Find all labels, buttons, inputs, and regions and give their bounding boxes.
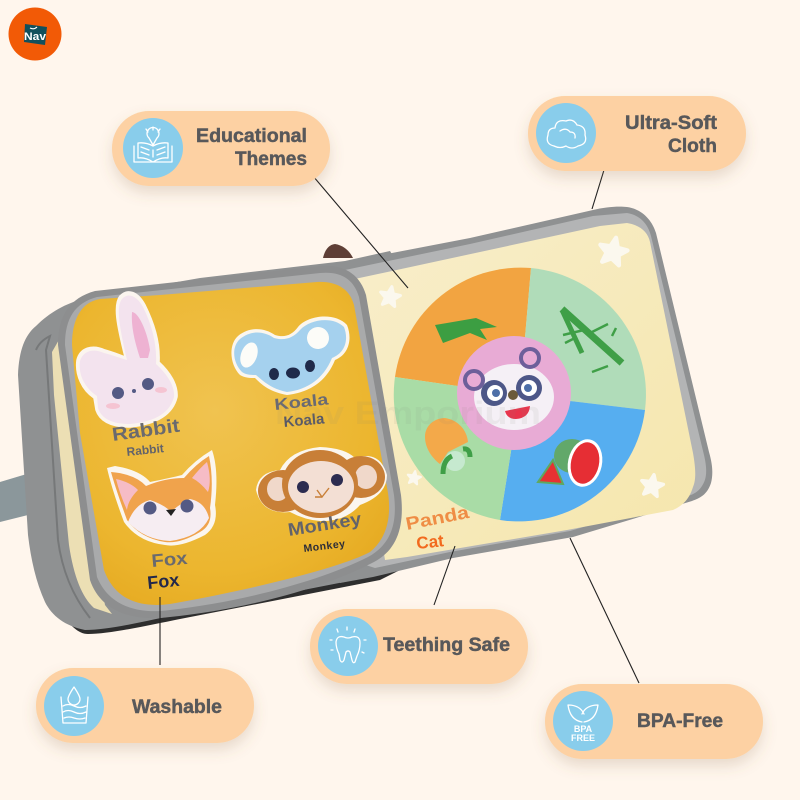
animal labels: Koala — [274, 391, 329, 414]
animal labels: Monkey — [303, 538, 346, 555]
callout: BPA-Free — [545, 684, 763, 759]
left green sector — [394, 377, 520, 520]
label: Panda / Cat: Panda — [404, 502, 472, 534]
icon: open book with light bulb — [123, 118, 183, 178]
right page binding — [340, 207, 712, 583]
label: Educational — [196, 126, 307, 147]
label: Washable — [132, 697, 222, 718]
label: Themes — [235, 149, 307, 170]
back layer seam — [36, 336, 90, 618]
animal labels: Fox — [146, 570, 180, 593]
panda hub — [457, 336, 571, 450]
label: Panda / Cat — [404, 502, 472, 553]
label: Cloth — [668, 136, 717, 157]
watermelon — [538, 436, 607, 490]
label — [196, 126, 307, 170]
animal labels — [111, 391, 363, 593]
back layers — [60, 500, 420, 634]
koala patch — [231, 317, 350, 395]
label: BPA-Free — [637, 711, 723, 732]
icon: water drop in tub — [44, 676, 104, 736]
animal labels: Fox — [151, 548, 188, 571]
rabbit patch — [77, 292, 177, 427]
logo — [8, 8, 62, 60]
bamboo — [562, 309, 622, 372]
right page — [345, 223, 695, 560]
blue sector — [500, 395, 645, 521]
label — [625, 113, 718, 157]
top green sector — [520, 268, 646, 410]
label: Panda / Cat: Cat — [415, 531, 445, 553]
bamboo shoot — [435, 318, 497, 343]
icon: BPA free leaves: BPA — [574, 724, 593, 734]
icon: BPA free leaves: FREE — [571, 733, 595, 743]
callout: Teething Safe — [310, 609, 528, 684]
left page binding — [58, 266, 402, 618]
icon: sparkling tooth — [318, 616, 378, 676]
animal labels: Rabbit — [111, 416, 182, 446]
callout: Educational Themes — [112, 111, 330, 186]
brown tab — [323, 244, 353, 258]
label: Ultra-Soft — [625, 113, 718, 134]
carrot — [425, 418, 470, 474]
animal labels: Monkey — [286, 509, 363, 540]
stars — [379, 235, 665, 497]
animal labels: Koala — [283, 410, 326, 431]
logo: Nav — [24, 31, 47, 43]
orange sector — [395, 268, 531, 395]
strap — [0, 473, 36, 522]
connector lines — [160, 170, 639, 683]
animal labels: Rabbit — [126, 441, 164, 459]
left yellow page — [72, 282, 389, 605]
label: Teething Safe — [383, 635, 510, 656]
callout: Washable — [36, 668, 254, 743]
inner page edge — [52, 338, 112, 614]
icon: BPA free leaves — [553, 691, 613, 751]
callout: Ultra-Soft Cloth — [528, 96, 746, 171]
book: cloth quiet book — [0, 207, 712, 634]
monkey patch — [256, 447, 387, 521]
spinner wheel — [394, 268, 646, 521]
watermark: Nav Emporium — [275, 395, 541, 431]
fox patch — [107, 450, 216, 546]
icon: soft cloud — [536, 103, 596, 163]
